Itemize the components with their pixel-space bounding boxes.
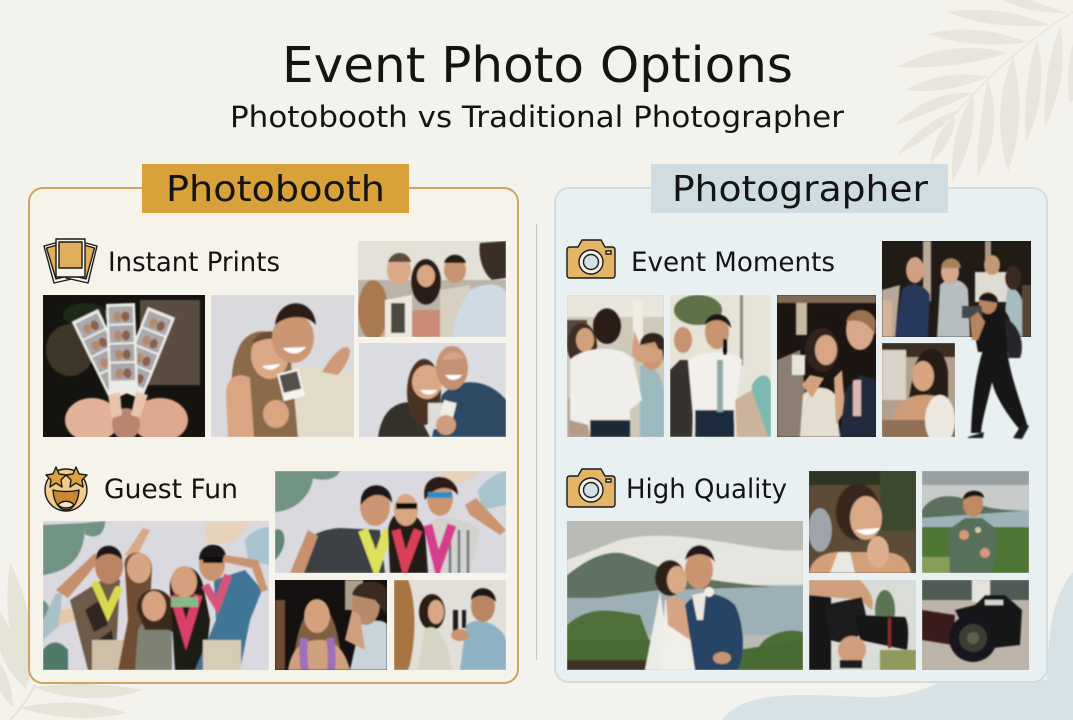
decorative blue wave bottom right — [722, 572, 1073, 720]
photo: guests with print — [358, 241, 506, 340]
photo: three friends with sunglasses — [275, 471, 506, 573]
photo: woman laughing with purple lei — [275, 580, 387, 670]
photo: woman laughing — [882, 343, 955, 445]
center divider — [536, 224, 537, 660]
photo: man in floral shirt — [922, 471, 1029, 573]
photo: bride and groom dancing — [777, 295, 876, 437]
heading: High Quality: High Quality — [626, 474, 787, 505]
photo: man with microphone — [670, 295, 771, 437]
decorative palm leaf top right — [895, 0, 1073, 182]
photo: camera on table — [922, 580, 1029, 670]
panel: Photobooth — [29, 164, 518, 683]
photo: hands holding camera — [809, 580, 916, 670]
photo: wedding couple with mountain — [567, 521, 803, 670]
heading: Guest Fun: Guest Fun — [104, 474, 238, 505]
photographer figure — [962, 292, 1029, 439]
photo: group with leis — [43, 521, 269, 670]
photo: smiling bride portrait — [808, 471, 916, 573]
panel: Photographer — [555, 164, 1047, 682]
heading: Instant Prints: Instant Prints — [108, 247, 280, 278]
badge: Photobooth — [142, 164, 409, 213]
badge: Photographer — [651, 164, 948, 213]
panel frame — [555, 188, 1047, 682]
photo: couple with camera gimbal — [394, 580, 506, 670]
decorative palm leaf bottom left — [0, 563, 143, 720]
heading: Event Moments: Event Moments — [631, 247, 835, 278]
panel frame — [29, 188, 518, 683]
icon: instant prints — [44, 239, 97, 283]
title: Event Photo Options — [282, 37, 793, 94]
photo: hands holding photo strips — [43, 295, 205, 442]
photo: couple in booth — [359, 343, 506, 437]
icon: camera — [567, 469, 615, 507]
subtitle: Photobooth vs Traditional Photographer — [230, 100, 844, 134]
badge: Photographer: Photographer — [672, 169, 928, 210]
icon: star-eyes face — [45, 467, 87, 511]
photo: man in white shirt, back view — [567, 295, 664, 437]
photo: couple with print — [211, 295, 354, 437]
icon: camera — [567, 240, 615, 278]
badge: Photobooth: Photobooth — [166, 169, 385, 210]
photo: crowd and photographer — [882, 241, 1031, 337]
